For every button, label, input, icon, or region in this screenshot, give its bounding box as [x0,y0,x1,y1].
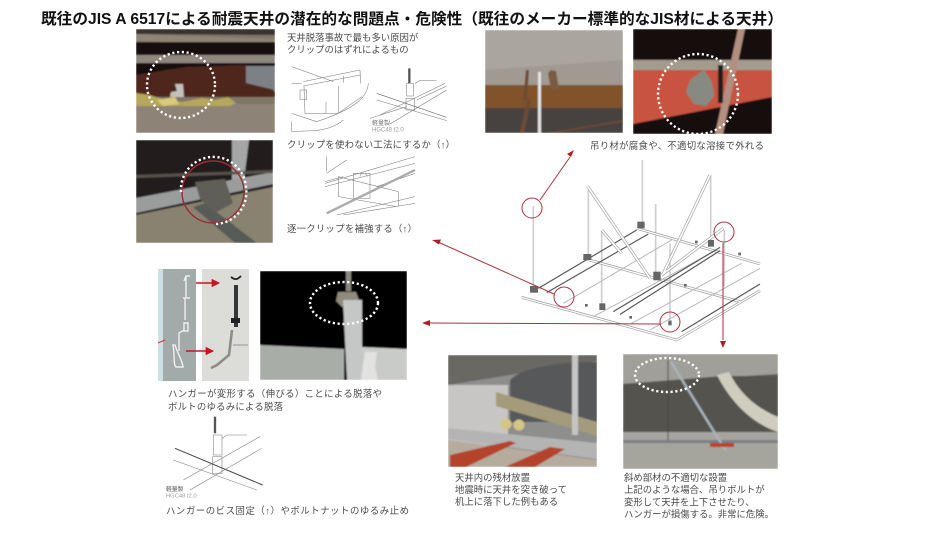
text: avoid clips: クリップを使わない工法にするか（↑） [287,139,455,150]
arrow: to diagonal brace photo [720,243,726,348]
callout: circles on diagram [522,198,734,332]
photo: loose bolt [260,271,407,380]
text: leftovers: 机上に落下した例もある [455,496,558,507]
text: reinforce clips: 逐一クリップを補強する（↑） [287,223,417,234]
text: diagonal brace: 上記のような場合、吊りボルトが [624,484,765,495]
text: leftovers: 地震時に天井を突き破って [455,484,567,495]
photo: clip detached [136,29,275,133]
text: hanger deformation [168,388,382,412]
photo: leftover material [448,355,597,467]
diagram: clip section [292,67,368,132]
arrow: to clip photos [432,240,554,294]
text: hanger corrosion: 吊り材が腐食や、不適切な溶接で外れる [590,140,764,151]
photo: corroded hanger [485,30,623,133]
label: material: 軽量製 [372,121,390,127]
text: leftovers: 天井内の残材放置 [455,472,530,483]
photo: bad weld [633,29,772,134]
label: material: HGC48 t2.0 [372,128,404,134]
text: clip detachment cause: 天井脱落事故で最も多い原因が [287,32,418,43]
photo: deformed hanger comparison [158,269,249,381]
diagram: clip reinforcement [325,157,415,215]
label: material 2: 軽量製 [166,487,183,493]
title: 既往のJIS A 6517による耐震天井の潜在的な問題点・危険性（既往のメーカー標準的なJIS材による天井） [41,9,783,28]
arrow: up to corrosion photos [540,150,574,200]
text: diagonal brace: 斜め部材の不適切な設置 [624,472,727,483]
label: material 2: HGC48 t2.0 [166,494,197,500]
text: hanger deformation: ボルトのゆるみによる脱落 [168,401,284,412]
arrow: to hanger photos [422,320,660,326]
text: hanger screw fix: ハンガーのビス固定（↑）やボルトナットのゆるみ止め [166,505,409,516]
text: clip detachment cause: クリップのはずれによるもの [287,44,409,55]
text: diagonal brace: 変形して天井を上下させたり、 [624,496,755,507]
photo: diagonal brace [623,354,778,469]
text: diagonal brace: ハンガーが損傷する。非常に危険。 [624,509,774,520]
photo: clip and runner [136,140,273,243]
diagram: hanger at cross joint [370,68,447,124]
diagram: hanger fixing [173,417,263,490]
diagram: ceiling isometric [522,160,760,340]
text: hanger deformation: ハンガーが変形する（伸びる）ことによる脱落や [168,388,382,399]
